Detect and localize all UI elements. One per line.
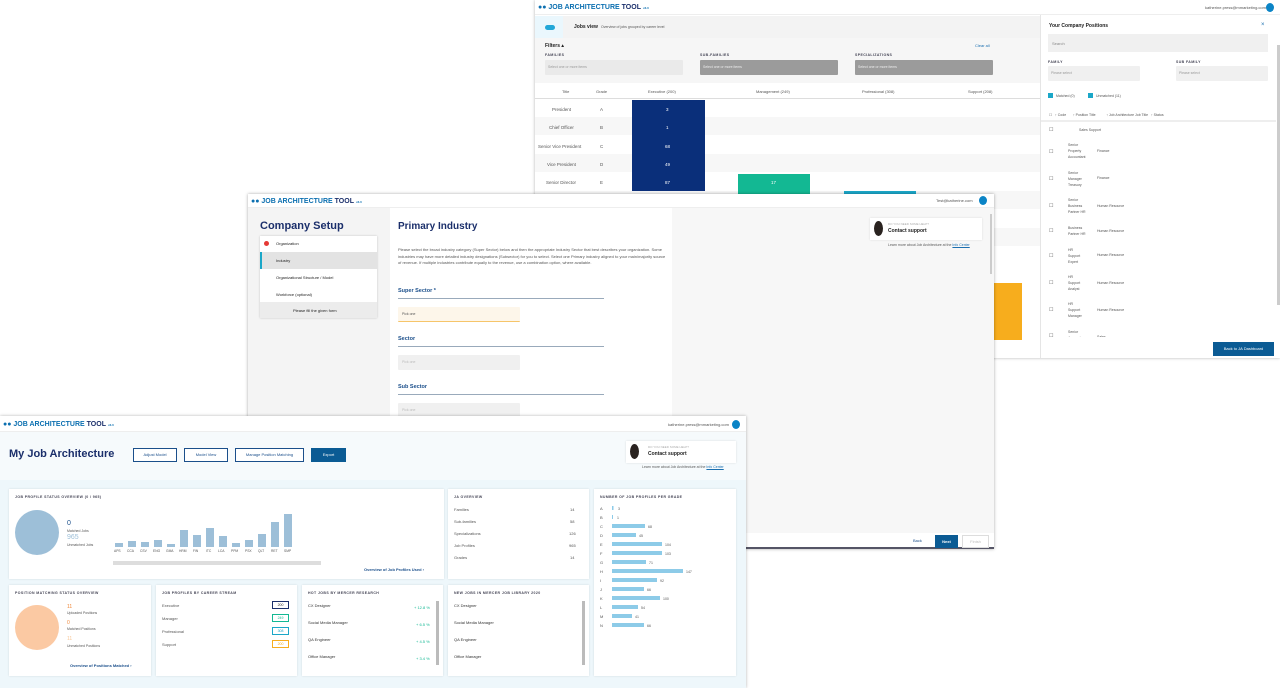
main: primary industry form: Primary Industry — [398, 221, 477, 232]
jobs view bar — [535, 16, 1040, 38]
drawer: your company positions: ☐ — [1049, 149, 1053, 155]
table A: 17 — [771, 180, 776, 185]
drawer: your company positions: Partner HR — [1068, 232, 1086, 236]
window: my job architecture (bottom left) — [0, 416, 746, 688]
bar chart: profiles by family — [113, 514, 321, 565]
bar chart: profiles by family: QLT — [258, 549, 264, 553]
card: job profile status overview: Overview of Job Profiles Used › — [364, 567, 424, 572]
main: primary industry form: Super Sector * — [398, 288, 436, 294]
table A: D — [600, 162, 603, 167]
card: profiles by career stream: Manager — [162, 616, 178, 621]
card: hot jobs: CX Designer — [308, 603, 331, 608]
card: JA overview: Sub-families — [454, 519, 476, 524]
drawer: your company positions: ☐ — [1049, 127, 1053, 133]
card: position matching status: Overview of Positions Matched › — [70, 663, 132, 668]
bar chart: profiles by family: PPM — [231, 549, 238, 553]
drawer: your company positions: × — [1261, 22, 1265, 28]
table A: Grade — [596, 89, 607, 94]
table A: 87 — [665, 180, 670, 185]
drawer: your company positions: Sales — [1097, 335, 1106, 339]
jobs view bar: Overview of jobs grouped by career level — [601, 25, 664, 29]
card: JA overview: 126 — [569, 531, 576, 536]
card: profiles per grade: J — [600, 587, 602, 592]
drawer: your company positions: Human Resource — [1097, 204, 1124, 208]
bar chart: profiles by family: ITC — [206, 549, 212, 553]
card: profiles per grade: NUMBER OF JOB PROFILES PER GRADE — [600, 495, 682, 499]
drawer: your company positions: ☐ — [1049, 307, 1053, 313]
drawer: your company positions: ☐ — [1049, 176, 1053, 182]
bar chart: profiles by family: APS — [114, 549, 121, 553]
window: jobs view (top right) — [535, 0, 1280, 358]
card: job profile status overview: Matched Jobs — [67, 529, 89, 533]
header A — [535, 0, 1280, 15]
main: primary industry form: Pick one — [402, 408, 415, 412]
card: hot jobs: HOT JOBS BY MERCER RESEARCH — [308, 591, 379, 595]
window: company setup (middle): Learn more about Job Architecture at the Info Center — [888, 243, 970, 247]
header B: Test@katherine.com — [936, 198, 973, 203]
card: hot jobs: + 3.4 % — [416, 656, 430, 661]
drawer: your company positions: Expert — [1068, 260, 1078, 264]
card: new jobs: Social Media Manager — [454, 620, 494, 625]
card: job profile status overview: 965 — [67, 534, 79, 541]
drawer: your company positions: Human Resource — [1097, 253, 1124, 257]
card: profiles per grade: 41 — [635, 615, 639, 619]
page title bar: My Job Architecture — [9, 448, 114, 460]
card: position matching status: Unmatched Positions — [67, 644, 100, 648]
card: hot jobs: + 4.5 % — [416, 639, 430, 644]
drawer: your company positions: Search — [1052, 41, 1065, 46]
card: profiles per grade: 3 — [618, 507, 620, 511]
drawer: your company positions: ☐ — [1049, 280, 1053, 286]
drawer: your company positions: Senior — [1068, 330, 1078, 334]
page title bar: Model View — [196, 452, 216, 457]
card: profiles per grade: E — [600, 542, 603, 547]
footer B — [248, 533, 994, 549]
sidebar: steps: Company Setup — [260, 220, 344, 232]
card: profiles by career stream: 200 — [278, 603, 283, 607]
card: hot jobs — [302, 585, 443, 676]
filters: Clear all — [975, 43, 990, 48]
table A: C — [600, 144, 603, 149]
footer B: Finish — [970, 539, 981, 544]
card: new jobs: CX Designer — [454, 603, 477, 608]
drawer: your company positions: HR — [1068, 275, 1073, 279]
bar chart: profiles by family: FIN — [193, 549, 199, 553]
sidebar: steps: Industry — [276, 258, 290, 263]
card: profiles per grade: 147 — [686, 570, 692, 574]
drawer: your company positions: Your Company Positions — [1049, 23, 1108, 29]
drawer: your company positions: Support — [1068, 254, 1080, 258]
drawer: your company positions: Senior — [1068, 143, 1078, 147]
bar chart: profiles by family: GMA — [166, 549, 174, 553]
card: job profile status overview: Unmatched Jobs — [67, 543, 93, 547]
card: JA overview: Families — [454, 507, 469, 512]
card: position matching status — [9, 585, 151, 676]
card: profiles per grade — [594, 489, 736, 676]
page title bar: Contact support — [648, 451, 687, 457]
header A: ●● JOB ARCHITECTURE TOOL v3.0 — [538, 4, 649, 11]
header B — [248, 194, 994, 208]
card: profiles per grade: 71 — [649, 561, 653, 565]
card: new jobs: NEW JOBS IN MERCER JOB LIBRARY 2020 — [454, 591, 541, 595]
drawer: your company positions: Accountant — [1068, 155, 1086, 159]
drawer: your company positions: Human Resource — [1097, 308, 1124, 312]
card: hot jobs: + 12.8 % — [414, 605, 430, 610]
filters: Select one or more items — [858, 65, 897, 69]
help card B — [870, 218, 982, 240]
table A: Senior Director — [546, 180, 576, 185]
table A: 68 — [665, 144, 670, 149]
drawer: your company positions: Matched (0) — [1056, 94, 1075, 98]
drawer: your company positions: Finance — [1097, 176, 1109, 180]
card: profiles per grade: 103 — [665, 552, 671, 556]
bar chart: profiles by family: LCA — [218, 549, 225, 553]
card: position matching status: POSITION MATCHING STATUS OVERVIEW — [15, 591, 99, 595]
card: profiles per grade: 66 — [647, 624, 651, 628]
main: primary industry form: Sub Sector — [398, 384, 427, 390]
card: profiles per grade: 92 — [660, 579, 664, 583]
drawer: your company positions: Senior — [1068, 171, 1078, 175]
card: profiles per grade: A — [600, 506, 603, 511]
drawer: your company positions: HR — [1068, 248, 1073, 252]
drawer: your company positions: Property — [1068, 149, 1081, 153]
card: profiles by career stream: Professional — [162, 629, 184, 634]
card: profiles by career stream: JOB PROFILES BY CAREER STREAM — [162, 591, 237, 595]
header C: ●● JOB ARCHITECTURE TOOL v3.0 — [3, 421, 114, 428]
page title bar: Learn more about Job Architecture at the Info Center — [642, 465, 724, 469]
main: primary industry form: Sector — [398, 336, 415, 342]
card: job profile status overview: 0 — [67, 520, 71, 527]
card: profiles per grade: L — [600, 605, 603, 610]
page title bar: DO YOU NEED SOME HELP? — [648, 445, 689, 449]
card: hot jobs: Social Media Manager — [308, 620, 348, 625]
bar chart: profiles by family: ENG — [153, 549, 161, 553]
drawer: your company positions — [1040, 15, 1280, 358]
drawer: your company positions: Please select — [1051, 71, 1072, 75]
sidebar: steps: Workforce (optional) — [276, 292, 312, 297]
card: profiles by career stream: Support — [162, 642, 176, 647]
card: position matching status: 11 — [67, 604, 72, 610]
table A: B — [600, 125, 603, 130]
drawer: your company positions: Unmatched (11) — [1096, 94, 1121, 98]
table A: 49 — [665, 162, 670, 167]
window: company setup (middle) — [248, 194, 994, 549]
card: JA overview: 58 — [570, 519, 574, 524]
filters: SPECIALIZATIONS — [855, 53, 892, 57]
drawer: your company positions: Business — [1068, 226, 1082, 230]
card: profiles per grade: 45 — [639, 534, 643, 538]
table A — [535, 89, 1040, 340]
filters: SUB-FAMILIES — [700, 53, 730, 57]
main: primary industry form: Pick one — [402, 312, 415, 316]
card: profiles per grade: N — [600, 623, 603, 628]
card: profiles per grade: K — [600, 596, 603, 601]
main: primary industry form: Please select the broad industry category (Super Sector) below and then the appropriate Industry Sector that best describes your organization. Some industries may have more detailed industry designations (Subsector) for you to select. Select one Primary industry aligned to your main/majority source of revenue. If multiple industries contribute equally to the revenue, use a combination option, where available. — [398, 247, 665, 265]
drawer: your company positions: Senior — [1068, 198, 1078, 202]
footer B: Next — [942, 539, 951, 544]
drawer: your company positions: Human Resource — [1097, 229, 1124, 233]
table A: Chief Officer — [549, 125, 574, 130]
card: profiles by career stream: 308 — [278, 629, 283, 633]
page title bar: Export — [323, 452, 334, 457]
card: profiles by career stream — [156, 585, 297, 676]
card: JA overview — [448, 489, 589, 579]
card: position matching status: 11 — [67, 636, 72, 642]
card: JA overview: 14 — [570, 555, 574, 560]
footer B: Back — [913, 538, 922, 543]
card: JA overview: Grades — [454, 555, 467, 560]
drawer: your company positions: Manager — [1068, 177, 1082, 181]
drawer: your company positions: Partner HR — [1068, 210, 1086, 214]
card: profiles per grade: D — [600, 533, 603, 538]
card: job profile status overview — [9, 489, 444, 579]
card: profiles per grade: 100 — [663, 597, 669, 601]
table A: Senior Vice President — [538, 144, 581, 149]
sidebar: steps: Organizational Structure / Model — [276, 275, 333, 280]
card: new jobs: Office Manager — [454, 654, 481, 659]
main: primary industry form — [390, 208, 672, 533]
bar chart: profiles by family: RET — [271, 549, 278, 553]
table A: Vice President — [547, 162, 576, 167]
card: profiles per grade: B — [600, 515, 603, 520]
bar chart: profiles by family: HRM — [179, 549, 187, 553]
drawer: your company positions: HR — [1068, 302, 1073, 306]
card: new jobs — [448, 585, 589, 676]
drawer: your company positions: Human Resource — [1097, 281, 1124, 285]
drawer: your company positions: Account — [1068, 336, 1081, 340]
page title bar: Manage Position Matching — [246, 452, 293, 457]
jobs view bar: Jobs view — [574, 24, 598, 30]
card: JA overview: 14 — [570, 507, 574, 512]
card: profiles per grade: I — [600, 578, 601, 583]
page title bar: Adjust Model — [143, 452, 167, 457]
table A: 3 — [666, 107, 669, 112]
filters: FAMILIES — [545, 53, 564, 57]
drawer: your company positions: Sales Support — [1079, 128, 1101, 132]
card: position matching status: Uploaded Positions — [67, 611, 97, 615]
main: primary industry form: Pick one — [402, 360, 415, 364]
drawer: your company positions: Support — [1068, 308, 1080, 312]
drawer: your company positions: Please select — [1179, 71, 1200, 75]
card: profiles per grade: G — [600, 560, 603, 565]
bar chart: profiles by family: CSV — [140, 549, 148, 553]
card: profiles per grade: F — [600, 551, 603, 556]
help card B: Contact support — [888, 228, 927, 234]
card: profiles by career stream: Executive — [162, 603, 179, 608]
card: hot jobs: QA Engineer — [308, 637, 331, 642]
drawer: your company positions: Support — [1068, 281, 1080, 285]
table A: E — [600, 180, 603, 185]
filters — [535, 38, 1040, 83]
table A: President — [552, 107, 571, 112]
drawer: your company positions: Manager — [1068, 314, 1082, 318]
drawer: your company positions: Back to JA Dashboard — [1224, 346, 1263, 351]
bar chart: profiles by family: CCA — [127, 549, 135, 553]
drawer: your company positions: Treasury — [1068, 183, 1082, 187]
header C — [0, 416, 746, 432]
bar chart: profiles by family: PSX — [245, 549, 252, 553]
drawer: your company positions: ☐ — [1049, 203, 1053, 209]
card: profiles per grade: C — [600, 524, 603, 529]
card: JA overview: Specializations — [454, 531, 481, 536]
table A: Title — [562, 89, 569, 94]
table A: Executive (200) — [648, 89, 676, 94]
drawer: your company positions: ☐ — [1049, 253, 1053, 259]
table A: Professional (308) — [862, 89, 894, 94]
card: profiles by career stream: 200 — [278, 642, 283, 646]
card: profiles by career stream: 249 — [278, 616, 283, 620]
card: new jobs: QA Engineer — [454, 637, 477, 642]
table A: 1 — [666, 125, 669, 130]
drawer: your company positions: Business — [1068, 204, 1082, 208]
header A: katherine.press@mmarketing.com — [1205, 5, 1266, 10]
table A: Support (208) — [968, 89, 992, 94]
card: profiles per grade: 68 — [648, 525, 652, 529]
filters: Select one or more items — [703, 65, 742, 69]
card: profiles per grade: 66 — [647, 588, 651, 592]
header C: katherine.press@mmarketing.com — [668, 422, 729, 427]
header B: ●● JOB ARCHITECTURE TOOL v3.0 — [251, 198, 362, 205]
card: hot jobs: Office Manager — [308, 654, 335, 659]
card: JA overview: 965 — [569, 543, 576, 548]
sidebar: steps — [248, 208, 390, 533]
card: JA overview: Job Profiles — [454, 543, 475, 548]
help card B: DO YOU NEED SOME HELP? — [888, 222, 929, 226]
card: profiles per grade: 1 — [617, 516, 619, 520]
card: JA overview: JA OVERVIEW — [454, 495, 483, 499]
table A: Management (249) — [756, 89, 790, 94]
sidebar: steps: Please fill the given form — [293, 308, 337, 313]
filters: Select one or more items — [548, 65, 587, 69]
page title bar — [0, 432, 746, 480]
filters: Filters ▴ — [545, 43, 564, 49]
drawer: your company positions: Analyst — [1068, 287, 1079, 291]
bar chart: profiles by family: SMP — [284, 549, 292, 553]
card: profiles per grade: M — [600, 614, 603, 619]
drawer: your company positions: FAMILY — [1048, 60, 1063, 64]
card: profiles per grade: H — [600, 569, 603, 574]
card: hot jobs: + 6.5 % — [416, 622, 430, 627]
card: position matching status: 0 — [67, 620, 70, 626]
card: job profile status overview: JOB PROFILE STATUS OVERVIEW (0 / 965) — [15, 495, 101, 499]
sidebar: steps: Organization — [276, 241, 299, 246]
drawer: your company positions: Finance — [1097, 149, 1109, 153]
drawer: your company positions: ☐ — [1049, 333, 1053, 339]
table A: A — [600, 107, 603, 112]
card: position matching status: Matched Positions — [67, 627, 96, 631]
card: profiles per grade: 104 — [665, 543, 671, 547]
drawer: your company positions: SUB FAMILY — [1176, 60, 1201, 64]
card: profiles per grade: 54 — [641, 606, 645, 610]
drawer: your company positions: ☐ ↑ Code ↑ Position Title ↑ Job Architecture Job Title ↑ Status — [1049, 113, 1164, 117]
drawer: your company positions: ☐ — [1049, 228, 1053, 234]
